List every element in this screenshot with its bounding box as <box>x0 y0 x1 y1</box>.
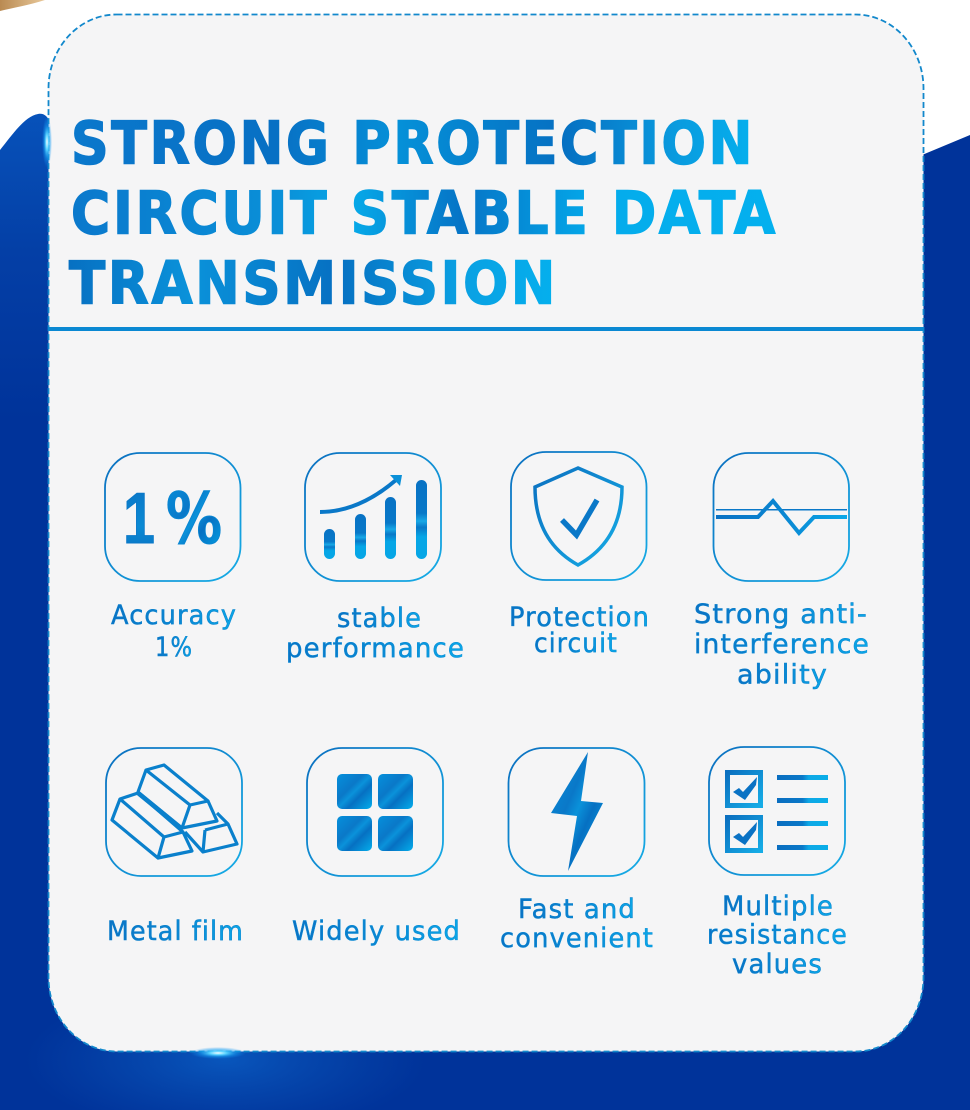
feature: anti-interference <box>694 453 870 690</box>
title divider <box>48 327 924 331</box>
label: protection circuit: Protection <box>509 602 650 633</box>
label: multiple resistance values <box>707 891 848 980</box>
label: protection circuit <box>509 602 650 659</box>
label: strong anti-interference ability: ability <box>737 660 828 690</box>
label: accuracy 1%: 1% <box>155 632 193 663</box>
feature: protection circuit <box>509 452 650 659</box>
label: strong anti-interference ability <box>694 599 870 690</box>
label: strong anti-interference ability: interference <box>694 629 870 660</box>
icon: shield with check <box>511 452 646 580</box>
label: stable performance: performance <box>286 633 465 664</box>
label: metal film: Metal film <box>107 916 244 947</box>
label: stable performance <box>286 603 465 664</box>
icon: 1 percent <box>105 453 240 581</box>
feature: accuracy 1% <box>105 453 240 663</box>
label: widely used: Widely used <box>292 916 461 947</box>
title: STRONG PROTECTION <box>71 108 755 178</box>
label: stable performance: stable <box>337 603 422 634</box>
label: multiple resistance values: values <box>732 949 823 980</box>
label: multiple resistance values: resistance <box>707 920 848 950</box>
icon: checklist <box>709 747 845 875</box>
title <box>69 108 778 318</box>
icon: 1 percent: % <box>166 478 222 560</box>
feature: multiple resistance values <box>707 747 848 980</box>
label: strong anti-interference ability: Strong anti- <box>694 599 868 630</box>
label: fast and convenient <box>500 894 654 954</box>
icon: signal wave <box>714 453 849 581</box>
icon: rising bar chart <box>305 453 441 581</box>
feature: widely used <box>292 748 461 947</box>
title: CIRCUIT STABLE DATA <box>71 178 778 248</box>
icon: four squares <box>307 748 443 876</box>
title: TRANSMISSION <box>69 248 558 318</box>
feature: fast and convenient <box>500 748 654 954</box>
label: fast and convenient: convenient <box>500 923 654 954</box>
label: accuracy 1% <box>111 600 237 663</box>
label: multiple resistance values: Multiple <box>722 891 834 922</box>
icon: metal ingots <box>106 748 242 876</box>
label: accuracy 1%: Accuracy <box>111 600 237 631</box>
icon: 1 percent: 1 <box>123 479 155 559</box>
label: protection circuit: circuit <box>534 628 618 659</box>
label: fast and convenient: Fast and <box>518 894 636 925</box>
icon: lightning bolt <box>508 748 644 876</box>
feature: metal film <box>106 748 244 947</box>
gold corner fragment <box>0 0 45 11</box>
feature: stable performance <box>286 453 465 664</box>
